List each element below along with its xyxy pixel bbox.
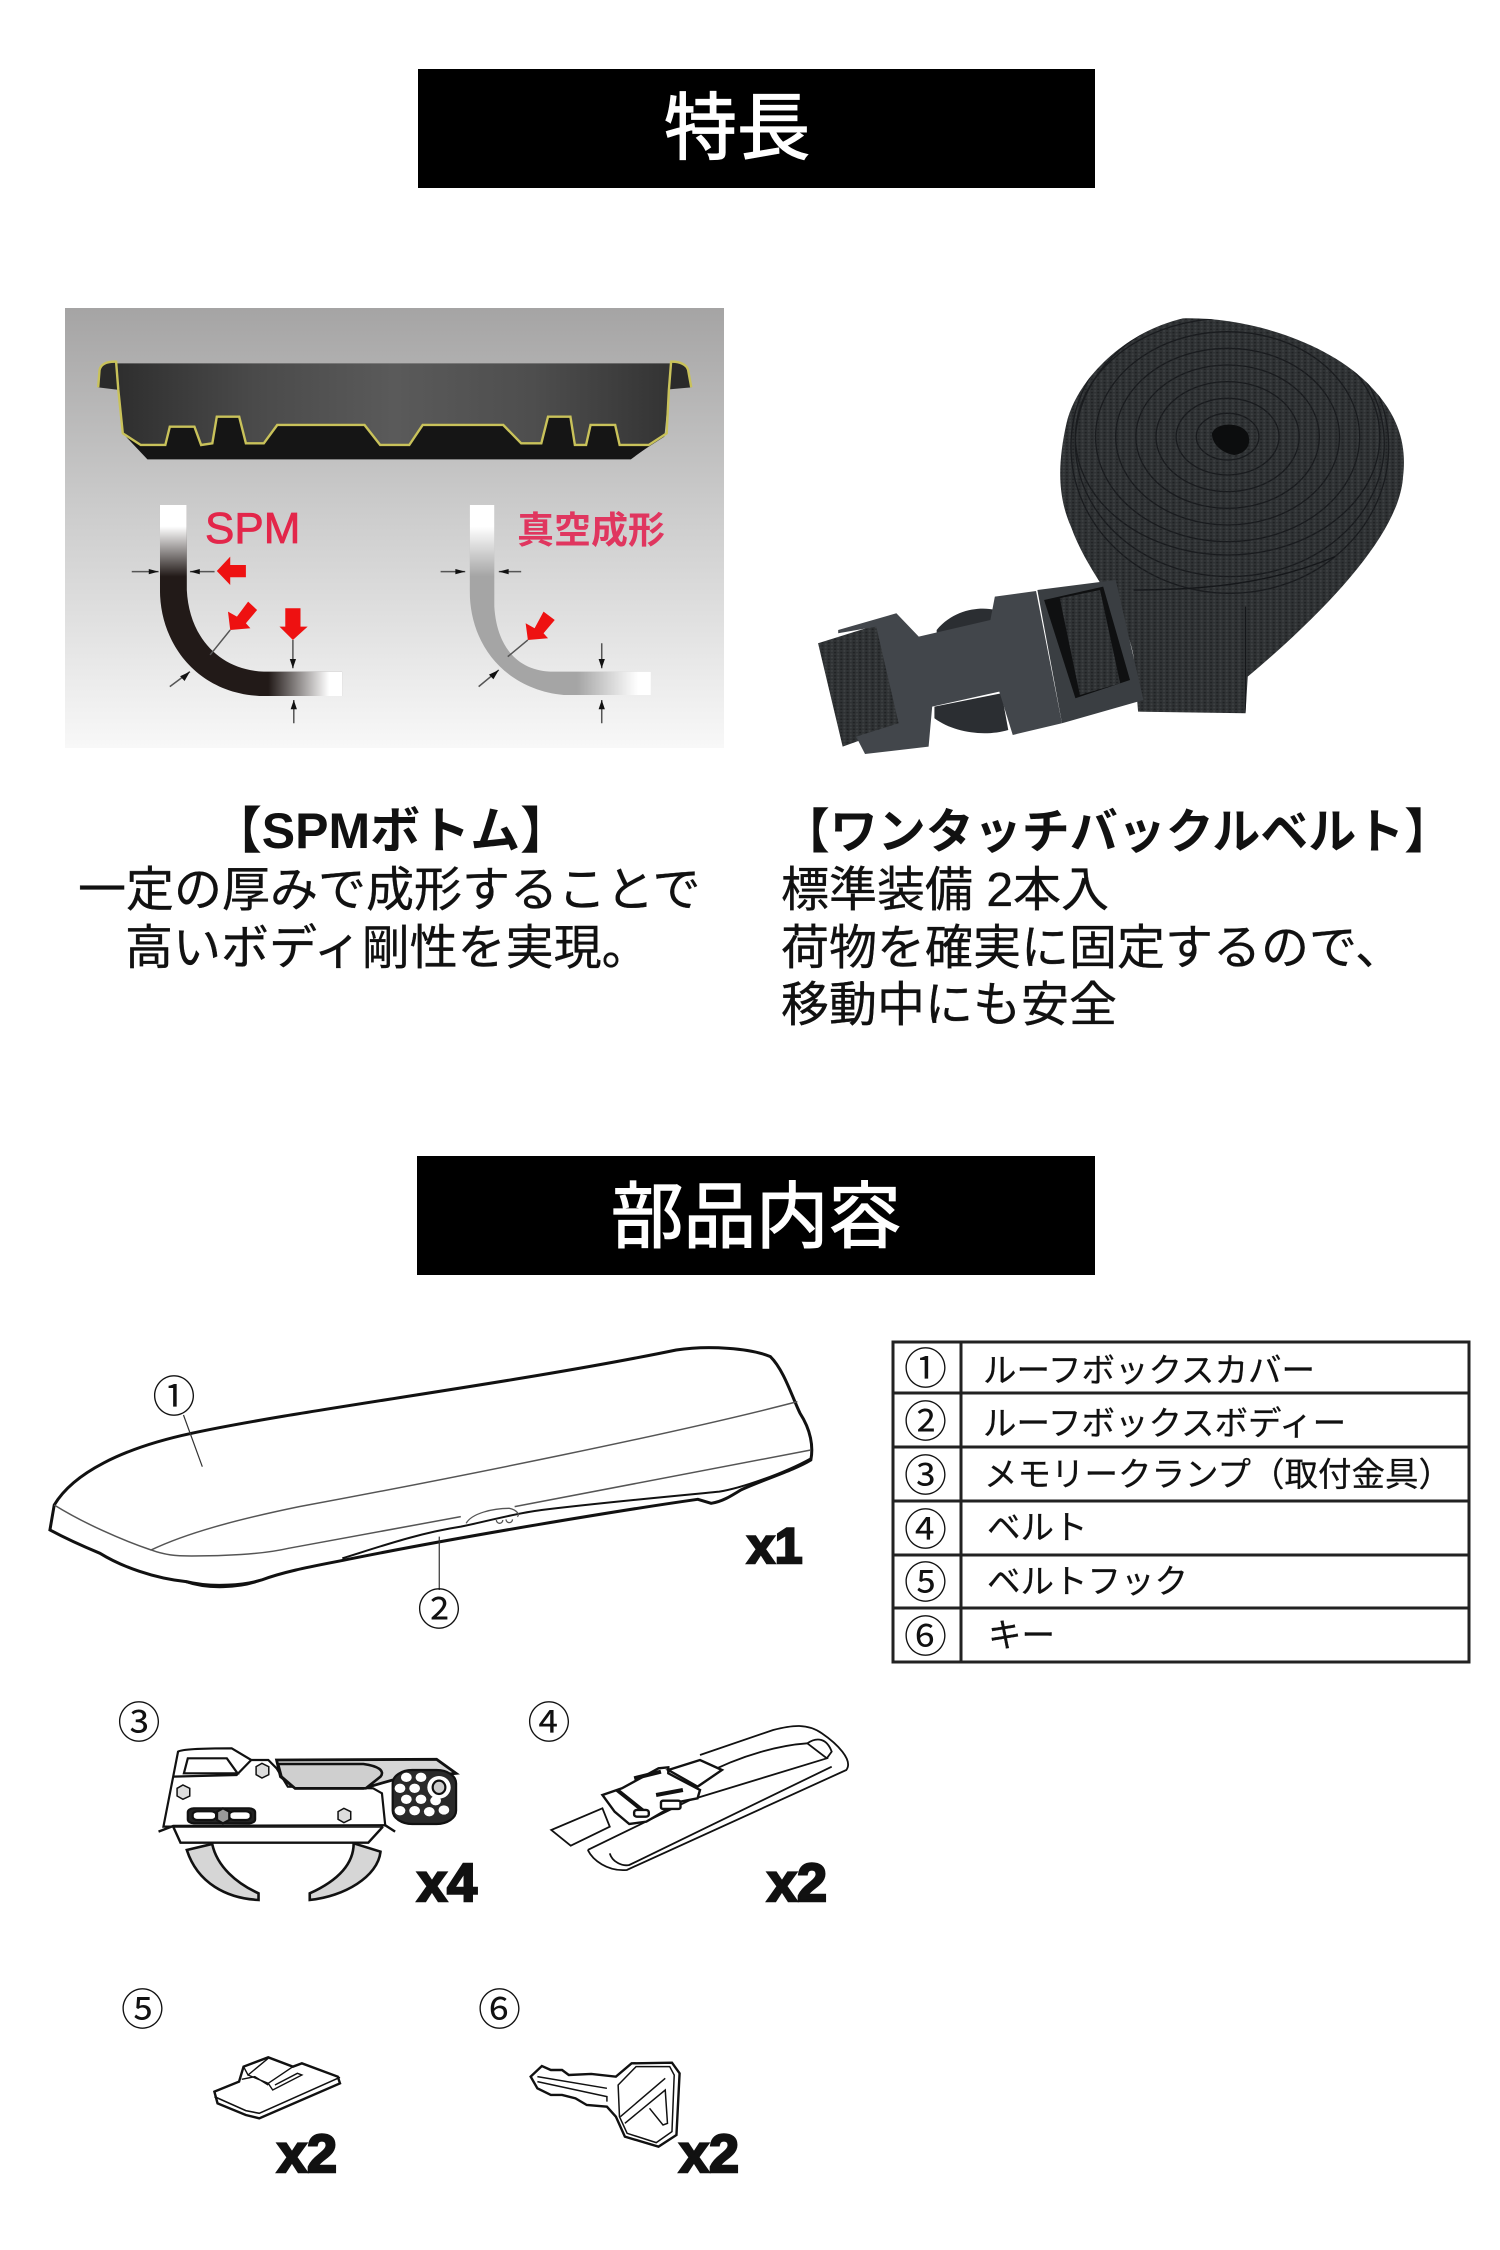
description: one-touch buckle belt: [781, 864, 1403, 1032]
row 4: ④: [904, 1507, 947, 1555]
subheading: SPM bottom: 【SPMボトム】: [212, 803, 570, 859]
row 5: [904, 1560, 1188, 1608]
heading: 特長: [418, 69, 1095, 188]
row 6: ⑥: [904, 1614, 947, 1662]
label: 真空成形: 真空成形: [517, 510, 665, 551]
label: SPM: SPM: [205, 504, 300, 553]
row 2: [904, 1399, 1346, 1447]
icon: roof box seams: [54, 1402, 811, 1587]
icon: dimension arrows: [132, 569, 605, 723]
row 5: ベルトフック: [987, 1564, 1188, 1601]
illustration: roof box: [50, 1348, 812, 1635]
quantity: x4: x4: [417, 1853, 477, 1913]
quantity: x2: x2: [679, 2124, 739, 2184]
callout: 6: ⑥: [478, 1987, 521, 2035]
row 4: ベルト: [987, 1510, 1088, 1547]
icon: plastic buckle: [818, 580, 1143, 754]
icon: clamp hooks: [187, 1843, 380, 1900]
icon: SPM thickness curve: [156, 503, 349, 700]
row 3: [904, 1453, 1452, 1501]
text block: one-touch buckle belt: [781, 806, 1452, 1032]
illustration: belt hook: [121, 1987, 340, 2184]
callout: 5: ⑤: [121, 1987, 164, 2035]
icon: clamp lever: [277, 1759, 456, 1824]
icon: red arrows: [217, 557, 555, 640]
row 6: キー: [988, 1618, 1055, 1655]
icon: rolled belt: [1060, 300, 1404, 713]
icon: vacuum forming thickness curve: [465, 503, 658, 700]
row 4: [904, 1507, 1088, 1555]
leader lines: [183, 1415, 439, 1590]
row 1: [904, 1346, 1315, 1394]
panel: SPM bottom cross-section image: [65, 308, 724, 748]
icon: belt strap: [551, 1726, 848, 1870]
quantity: x2: x2: [277, 2124, 337, 2184]
text block: SPM bottom: [78, 803, 701, 975]
illustration: memory clamp: [118, 1700, 477, 1913]
quantity: x2: x2: [767, 1853, 827, 1913]
subheading: one-touch buckle belt: 【ワンタッチバックルベルト】: [782, 806, 1452, 859]
icon: hull cross-section: [98, 362, 691, 459]
heading: 部品内容: 部品内容: [611, 1177, 901, 1258]
row 6: [904, 1614, 1055, 1662]
row 5: ⑤: [904, 1560, 947, 1608]
panel: buckle belt photo: [818, 300, 1404, 754]
description: SPM bottom: [78, 864, 701, 975]
description: one-touch buckle belt: 荷物を確実に固定するので、: [781, 922, 1403, 975]
illustration: belt: [528, 1700, 848, 1913]
row 2: ②: [904, 1399, 947, 1447]
row 3: ③: [904, 1453, 947, 1501]
table: parts list: [893, 1342, 1469, 1662]
heading: 特長: 特長: [664, 88, 810, 169]
description: SPM bottom: 高いボディ剛性を実現。: [125, 922, 650, 975]
callout: 3: ③: [118, 1700, 160, 1748]
callout: 1: ①: [152, 1374, 196, 1422]
icon: key: [531, 2063, 680, 2147]
quantity: x1: x1: [747, 1518, 803, 1574]
icon: clamp body: [159, 1748, 395, 1843]
illustration: key: [478, 1987, 739, 2184]
row 1: ルーフボックスカバー: [983, 1353, 1315, 1390]
row 3: メモリークランプ（取付金具）: [984, 1457, 1452, 1494]
icon: roof box outline: [50, 1348, 812, 1585]
callout: 2: ②: [418, 1587, 460, 1635]
callout: 4: ④: [528, 1700, 570, 1748]
icon: belt buckle: [602, 1760, 722, 1824]
icon: belt hook: [214, 2057, 340, 2118]
heading: 部品内容: [417, 1156, 1095, 1275]
description: one-touch buckle belt: 移動中にも安全: [781, 979, 1117, 1032]
description: one-touch buckle belt: 標準装備 2本入: [781, 864, 1109, 917]
row 1: ①: [904, 1346, 947, 1394]
description: SPM bottom: 一定の厚みで成形することで: [78, 864, 701, 917]
row 2: ルーフボックスボディー: [983, 1406, 1346, 1443]
